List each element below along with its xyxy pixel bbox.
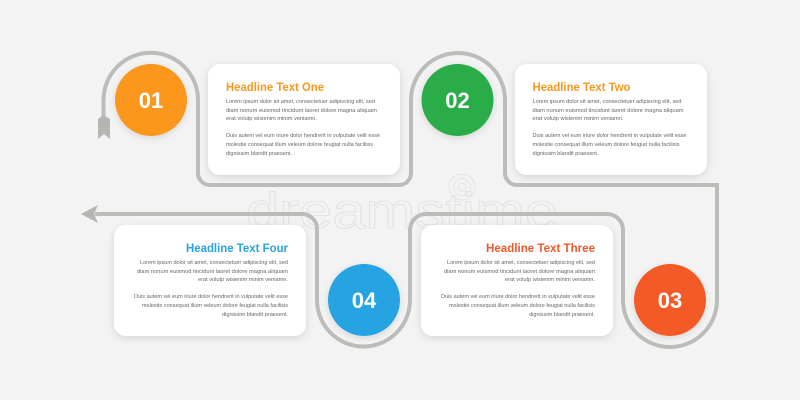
body text: step three: diam nonum euismod tincidunt laoret dolore magna aliquam — [444, 269, 596, 275]
body text: step two: erat volutp wisienim minim veniamn. — [532, 116, 624, 122]
heading: step three: Headline Text Three — [486, 243, 595, 255]
body text: step four: molestie consequat illum veleum dolore feugiat nulla facilisis — [142, 303, 288, 309]
heading: step two: Headline Text Two — [532, 82, 630, 94]
body text: step one — [226, 99, 380, 157]
step 04 badge: 04 — [352, 288, 377, 313]
icon: path start ribbon — [98, 115, 110, 139]
body text: step two: dignissim blandit praesent. — [532, 151, 598, 157]
step 03 badge: 03 — [658, 288, 682, 313]
body text: step three: dignissim blandit praesent. — [529, 312, 595, 318]
body text: step one: diam nonum euismod tincidunt laoret dolore magna aliquam — [226, 108, 378, 114]
body text: step two: Duis autem vel eum iriure dolor hendrerit in vulputate velit esse — [532, 133, 686, 139]
body text: step three: molestie consequat illum veleum dolore feugiat nulla facilisis — [449, 303, 595, 309]
panel: step four — [114, 225, 306, 336]
watermark: dreamstime — [246, 183, 558, 239]
body text: step one: dignissim blandit praesent. — [226, 151, 292, 157]
body text: step four — [134, 260, 289, 318]
body text: step three — [441, 260, 596, 318]
body text: step four: diam nonum euismod tincidunt laoret dolore magna aliquam — [137, 269, 289, 275]
body text: step one: Lorem ipsum dolor sit amet, consectetuer adipiscing elit, sed — [226, 99, 375, 105]
step 01 badge — [115, 64, 187, 136]
step 04 badge — [328, 264, 400, 336]
body text: step two — [532, 99, 686, 157]
heading: step four: Headline Text Four — [186, 243, 289, 255]
step 01 badge: 01 — [139, 88, 163, 113]
timeline path — [95, 53, 717, 347]
body text: step three: Duis autem vel eum iriure dolor hendrerit in vulputate velit esse — [441, 294, 595, 300]
arrow: path end — [81, 205, 98, 223]
body text: step one: molestie consequat illum veleum dolore feugiat nulla facilisis — [226, 142, 373, 148]
body text: step three: erat volutp wisienim minim veniamn. — [505, 277, 595, 283]
panel: step two — [515, 64, 707, 175]
body text: step four: dignissim blandit praesent. — [222, 312, 288, 318]
body text: step four: erat volutp wisienim minim veniamn. — [198, 277, 288, 283]
body text: step one: erat volutp wisienim minim veniamn. — [226, 116, 317, 122]
heading: step one: Headline Text One — [226, 82, 324, 94]
body text: step three: Lorem ipsum dolor sit amet, consectetuer adipiscing elit, sed — [447, 260, 595, 266]
step 02 badge — [422, 64, 494, 136]
panel: step one — [208, 64, 400, 175]
body text: step one: Duis autem vel eum iriure dolor hendrerit in vulputate velit esse — [226, 133, 380, 139]
body text: step two: Lorem ipsum dolor sit amet, consectetuer adipiscing elit, sed — [532, 99, 682, 105]
step 03 badge — [634, 264, 706, 336]
body text: step four: Duis autem vel eum iriure dolor hendrerit in vulputate velit esse — [134, 294, 288, 300]
body text: step four: Lorem ipsum dolor sit amet, consectetuer adipiscing elit, sed — [140, 260, 288, 266]
body text: step two: molestie consequat illum veleum dolore feugiat nulla facilisis — [532, 142, 680, 148]
panel: step three — [421, 225, 613, 336]
step 02 badge: 02 — [445, 88, 470, 113]
body text: step two: diam nonum euismod tincidunt laoret dolore magna aliquam — [532, 108, 684, 114]
